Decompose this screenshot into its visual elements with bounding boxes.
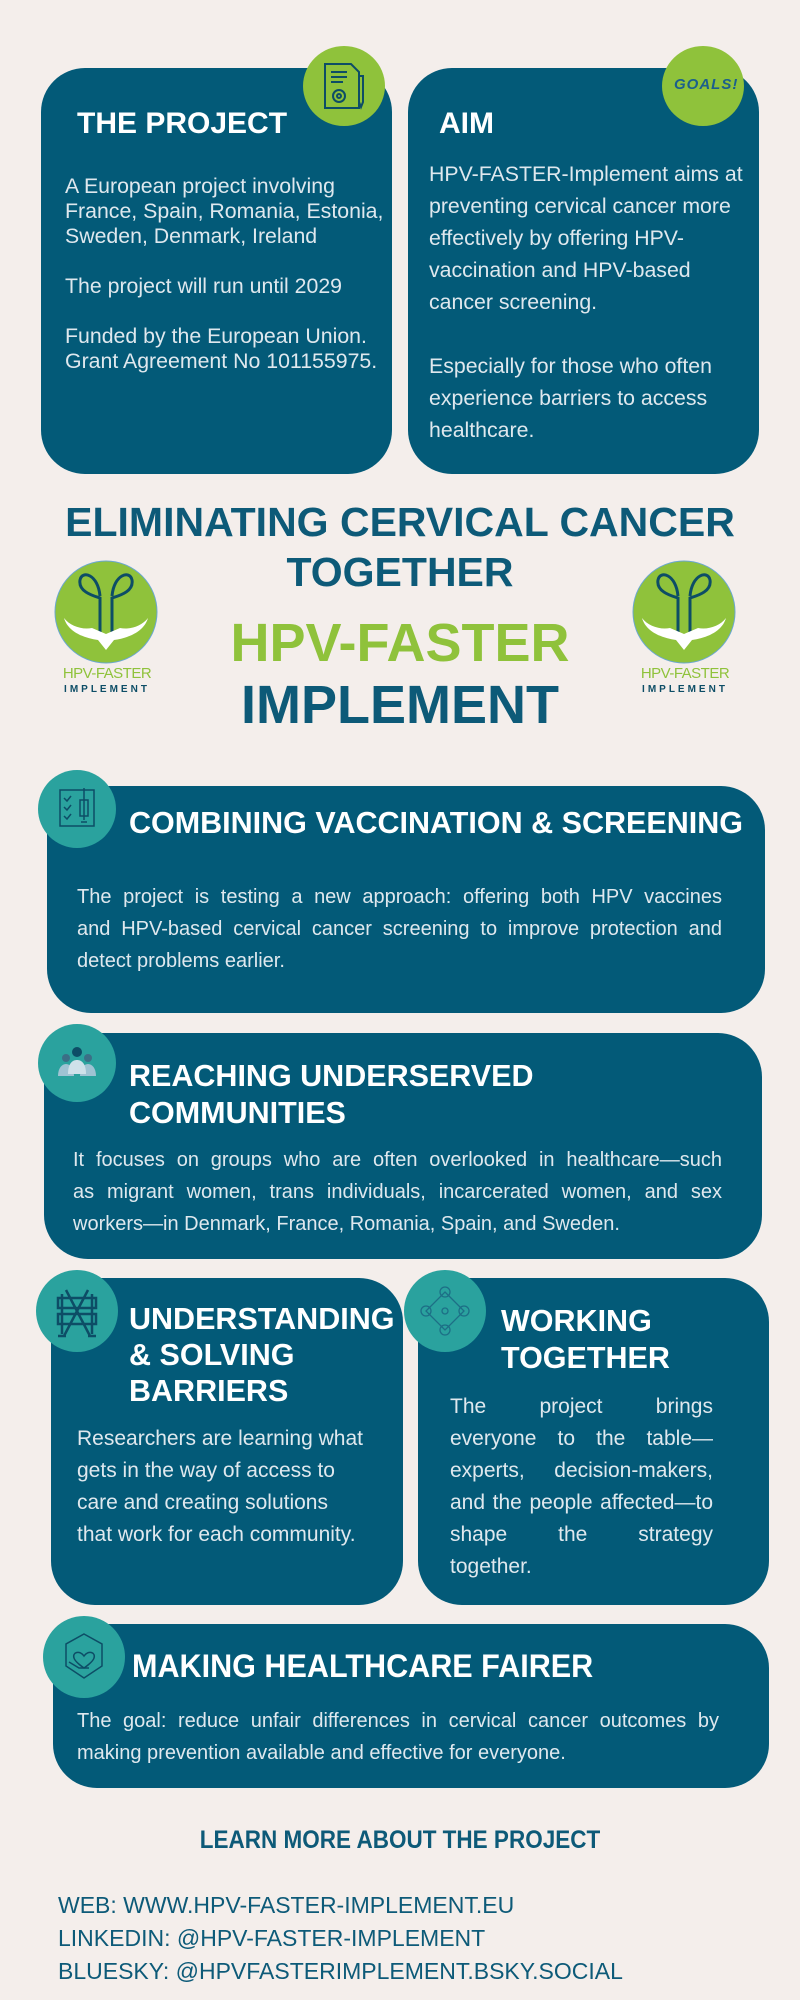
text: project details: France, Spain, Romania, Estonia, [65,199,383,223]
text: aim details: effectively by offering HPV- [429,226,684,250]
text: combining body: detect problems earlier. [77,950,285,972]
heading: working together [501,1304,670,1375]
text: understanding body: Researchers are learning what [77,1427,363,1450]
text: combining body: The project is testing a new approach: offering both HPV vaccines [77,886,722,908]
text: working body: and the people affected—to [450,1491,713,1514]
heading: understanding: BARRIERS [129,1374,288,1408]
panel: reaching underserved communities [44,1033,762,1259]
text: making body: The goal: reduce unfair differences in cervical cancer outcomes by [77,1710,719,1732]
heading: understanding: UNDERSTANDING [129,1302,394,1336]
text: aim details: preventing cervical cancer more [429,194,731,218]
title: eliminating cervical cancer together [65,499,735,595]
text: combining body: and HPV-based cervical cancer screening to improve protection and [77,918,722,940]
heading: aim: AIM [439,107,494,140]
text: working body: everyone to the table— [450,1427,713,1450]
text: contact links: LINKEDIN: @HPV-FASTER-IMPLEMENT [58,1925,485,1951]
heading: working together: TOGETHER [501,1341,670,1375]
text: making body: making prevention available and effective for everyone. [77,1742,566,1764]
heading: working together: WORKING [501,1304,652,1338]
panel: making healthcare fairer [53,1624,769,1788]
text: project details: Grant Agreement No 101155975. [65,349,377,373]
heading: understanding: & SOLVING [129,1338,295,1372]
logo: left [54,560,158,695]
title: implement: IMPLEMENT [241,675,559,735]
text: project details: The project will run until 2029 [65,274,342,298]
heading: making healthcare fairer: MAKING HEALTHCARE FAIRER [132,1648,593,1684]
logo: right: HPV-FASTER [641,665,729,682]
text: combining body [77,886,722,972]
text: reaching body: It focuses on groups who are often overlooked in healthcare—such [73,1149,722,1171]
icon: heart hand [43,1616,125,1698]
text: project details [65,174,383,373]
text: reaching body [73,1149,722,1235]
icon: checklist syringe [38,770,116,848]
panel: combining vaccination & screening [47,786,765,1013]
text: working body: together. [450,1555,532,1578]
text: contact links: BLUESKY: @HPVFASTERIMPLEMENT.BSKY.SOCIAL [58,1958,623,1984]
panel: aim [408,68,759,474]
heading: learn more: LEARN MORE ABOUT THE PROJECT [200,1826,600,1854]
text: understanding body [77,1427,363,1546]
icon: goals badge [662,46,744,126]
text: aim details: HPV-FASTER-Implement aims at [429,162,743,186]
heading: reaching: COMMUNITIES [129,1096,346,1130]
logo: right: IMPLEMENT [642,684,728,695]
logo: left: HPV-FASTER [63,665,151,682]
panel: the project [41,68,392,474]
text: working body: experts, decision-makers, [450,1459,713,1482]
text: understanding body: gets in the way of access to [77,1459,335,1482]
heading: reaching: REACHING UNDERSERVED [129,1059,533,1093]
title: eliminating cervical cancer together: TOGETHER [286,549,514,595]
text: working body: The project brings [450,1395,713,1418]
text: contact links [58,1892,623,1984]
logo: left: IMPLEMENT [64,684,150,695]
text: aim details: vaccination and HPV-based [429,258,691,282]
icon: people group [38,1024,116,1102]
text: project details: Sweden, Denmark, Ireland [65,224,317,248]
text: aim details: Especially for those who often [429,354,712,378]
text: aim details [429,162,743,442]
text: understanding body: that work for each community. [77,1523,356,1546]
text: aim details: cancer screening. [429,290,597,314]
text: working body: shape the strategy [450,1523,713,1546]
text: contact links: WEB: WWW.HPV-FASTER-IMPLEMENT.EU [58,1892,514,1918]
panel: working together [418,1278,769,1605]
icon: goals badge: GOALS! [674,76,738,93]
text: reaching body: as migrant women, trans individuals, incarcerated women, and sex [73,1181,722,1203]
heading: understanding [129,1302,394,1408]
icon: document gear [303,46,385,126]
title: eliminating cervical cancer together: ELIMINATING CERVICAL CANCER [65,499,735,545]
panel: understanding & solving barriers [51,1278,403,1605]
text: understanding body: care and creating solutions [77,1491,328,1514]
heading: combining: COMBINING VACCINATION & SCREENING [129,806,743,840]
text: reaching body: workers—in Denmark, France, Romania, Spain, and Sweden. [73,1213,620,1235]
text: making body [77,1710,719,1764]
icon: barrier [36,1270,118,1352]
heading: the project: THE PROJECT [77,107,287,140]
icon: network [404,1270,486,1352]
text: working body [450,1395,713,1578]
title: hpv-faster: HPV-FASTER [230,613,570,673]
text: aim details: healthcare. [429,418,534,442]
heading: reaching [129,1059,533,1130]
logo: right [632,560,736,695]
text: aim details: experience barriers to access [429,386,707,410]
text: project details: Funded by the European Union. [65,324,367,348]
text: project details: A European project involving [65,174,335,198]
